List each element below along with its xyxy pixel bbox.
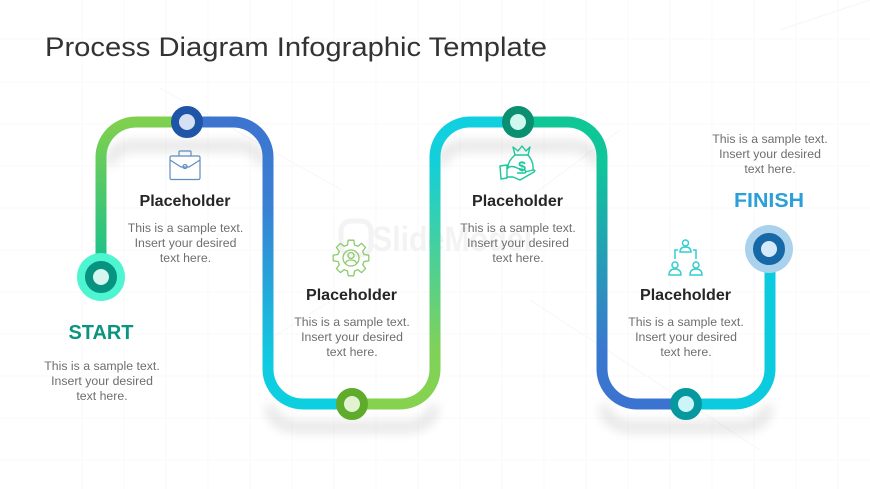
step 3 text: This is a sample text. <box>460 221 576 235</box>
step 1 text: text here. <box>160 251 211 265</box>
step 4 text: Placeholder <box>640 287 731 304</box>
finish label: FINISH <box>734 190 804 212</box>
icon: briefcase <box>170 151 200 180</box>
finish text: text here. <box>744 162 796 176</box>
step 4 text: This is a sample text. <box>628 315 744 329</box>
step 3 text <box>460 193 576 265</box>
step 4 text <box>628 287 744 359</box>
node: step 2 <box>340 392 364 416</box>
step 2 text <box>294 287 410 359</box>
step 3 text: text here. <box>492 251 544 265</box>
segment: node 1 to node 2 <box>187 122 352 404</box>
start text: text here. <box>76 389 128 403</box>
start label: START <box>68 322 134 344</box>
step 2 text: Placeholder <box>306 287 397 304</box>
node: finish <box>745 225 793 273</box>
finish text: This is a sample text. <box>712 132 828 146</box>
icon: money bag in hand: $ <box>518 158 526 174</box>
icon: team hierarchy <box>669 240 702 275</box>
node: start <box>77 253 125 301</box>
path shadows <box>110 146 768 427</box>
step 2 text: Insert your desired <box>301 330 403 344</box>
step 2 text: text here. <box>326 345 378 359</box>
step 4 text: text here. <box>660 345 712 359</box>
node: step 1 <box>175 110 199 134</box>
start text: Insert your desired <box>51 374 153 388</box>
watermark: SlideModel <box>372 220 532 259</box>
step 1 text <box>128 193 243 265</box>
step 3 text: Insert your desired <box>467 236 569 250</box>
step 2 text: This is a sample text. <box>294 315 410 329</box>
segment: node 2 to node 3 <box>352 122 518 404</box>
step 1 text: This is a sample text. <box>128 221 243 235</box>
icon: gear with person <box>333 240 369 276</box>
step 4 text: Insert your desired <box>635 330 737 344</box>
segment: start to node 1 <box>101 122 187 277</box>
title: Process Diagram Infographic Template <box>45 32 547 62</box>
step 1 text: Placeholder <box>140 193 230 210</box>
path: winding process line <box>101 122 770 404</box>
icon: money bag in hand <box>500 146 535 180</box>
segment: node 3 to node 4 <box>518 122 686 404</box>
step 1 text: Insert your desired <box>135 236 237 250</box>
node: step 3 <box>506 110 530 134</box>
start text: This is a sample text. <box>44 359 160 373</box>
node: step 4 <box>674 392 698 416</box>
step 3 text: Placeholder <box>472 193 563 210</box>
finish text: Insert your desired <box>719 147 821 161</box>
segment: node 4 to finish <box>686 250 770 404</box>
